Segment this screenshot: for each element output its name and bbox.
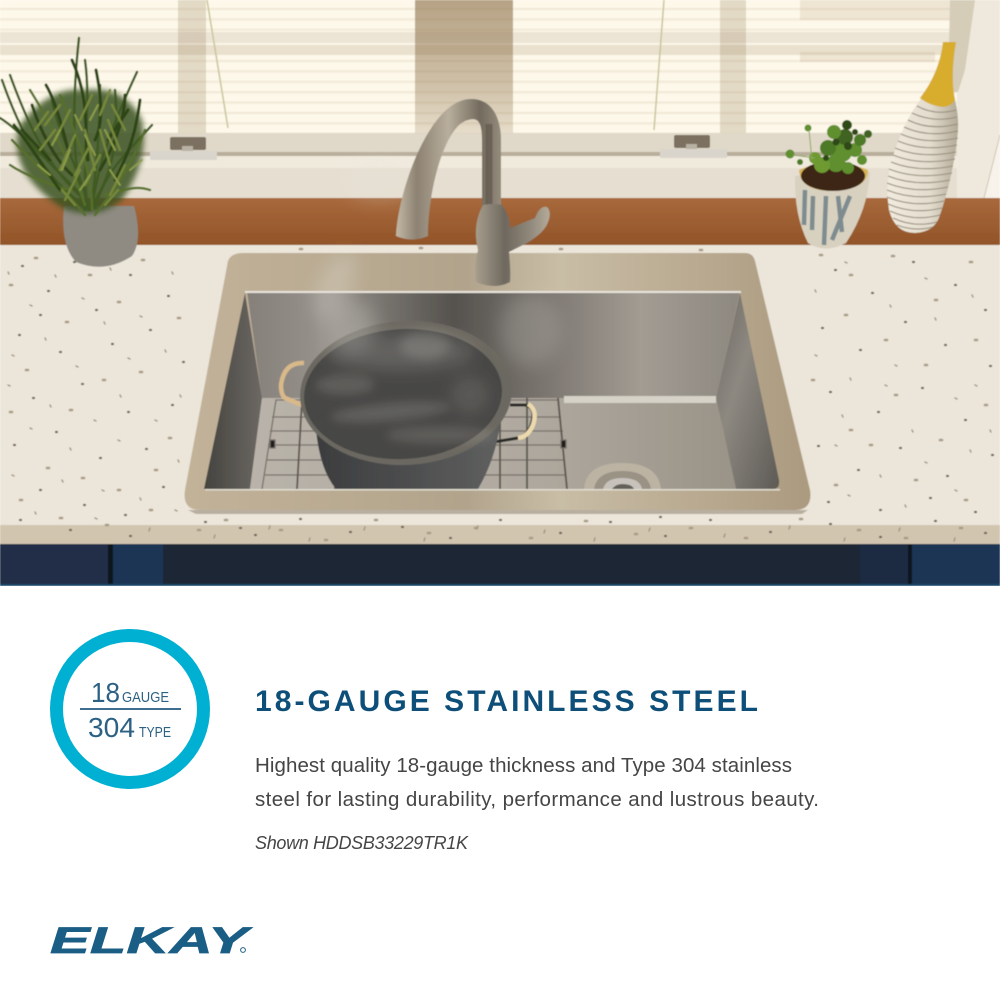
badge gauge label: 18 (91, 677, 120, 708)
logo: Elkay: ELKAY (50, 919, 253, 961)
pot handle: right (494, 405, 533, 442)
model note: Shown HDDSB33229TR1K (255, 833, 469, 853)
faucet (396, 99, 550, 286)
pot rim and interior (296, 316, 516, 470)
countertop shadow below flange (188, 510, 808, 514)
badge type label: 304 (88, 712, 135, 743)
bottom flange highlight (205, 489, 780, 490)
pot body (316, 425, 500, 489)
right plant leaves (786, 120, 872, 174)
pot (281, 316, 535, 489)
left plant (0, 38, 152, 267)
badge gauge label: GAUGE (122, 690, 169, 706)
body text: steel for lasting durability, performance and lustrous beauty. (255, 788, 819, 811)
sink (185, 158, 810, 510)
badge type label: TYPE (139, 725, 171, 741)
sink flange (185, 253, 810, 510)
wall right of window (957, 0, 1000, 198)
window latch: left (150, 137, 217, 160)
vase (887, 42, 958, 233)
steam (306, 158, 560, 444)
photo: kitchen sink scene (0, 0, 1000, 586)
basin back wall (247, 291, 740, 398)
badge type label (88, 712, 171, 743)
gauge badge (56, 636, 204, 782)
wooden shelf (0, 198, 1000, 246)
window blinds (0, 0, 965, 134)
left plant leaves (0, 38, 152, 215)
basin floor (250, 398, 736, 489)
badge divider (80, 708, 181, 710)
basin left wall (204, 293, 262, 489)
countertop (0, 245, 1000, 544)
basin right wall (716, 293, 779, 489)
pot handle: left (281, 363, 304, 405)
cabinet (0, 544, 1000, 586)
left plant foliage mass (17, 89, 144, 213)
blinds edge (948, 0, 975, 92)
logo: Elkay (50, 919, 253, 961)
body text (255, 754, 819, 811)
badge gauge label (91, 677, 169, 708)
left plant pot (63, 206, 138, 267)
heading: 18-GAUGE STAINLESS STEEL (255, 685, 758, 718)
white information panel (0, 586, 1000, 1000)
right plant pot (795, 172, 870, 248)
sink drain (584, 463, 661, 489)
badge ring (56, 636, 204, 782)
right plant (786, 120, 872, 248)
window frame and sill (0, 133, 965, 199)
dish rack (262, 398, 567, 489)
window latch: right (660, 135, 727, 158)
body text: Highest quality 18-gauge thickness and Type 304 stainless (255, 754, 792, 777)
